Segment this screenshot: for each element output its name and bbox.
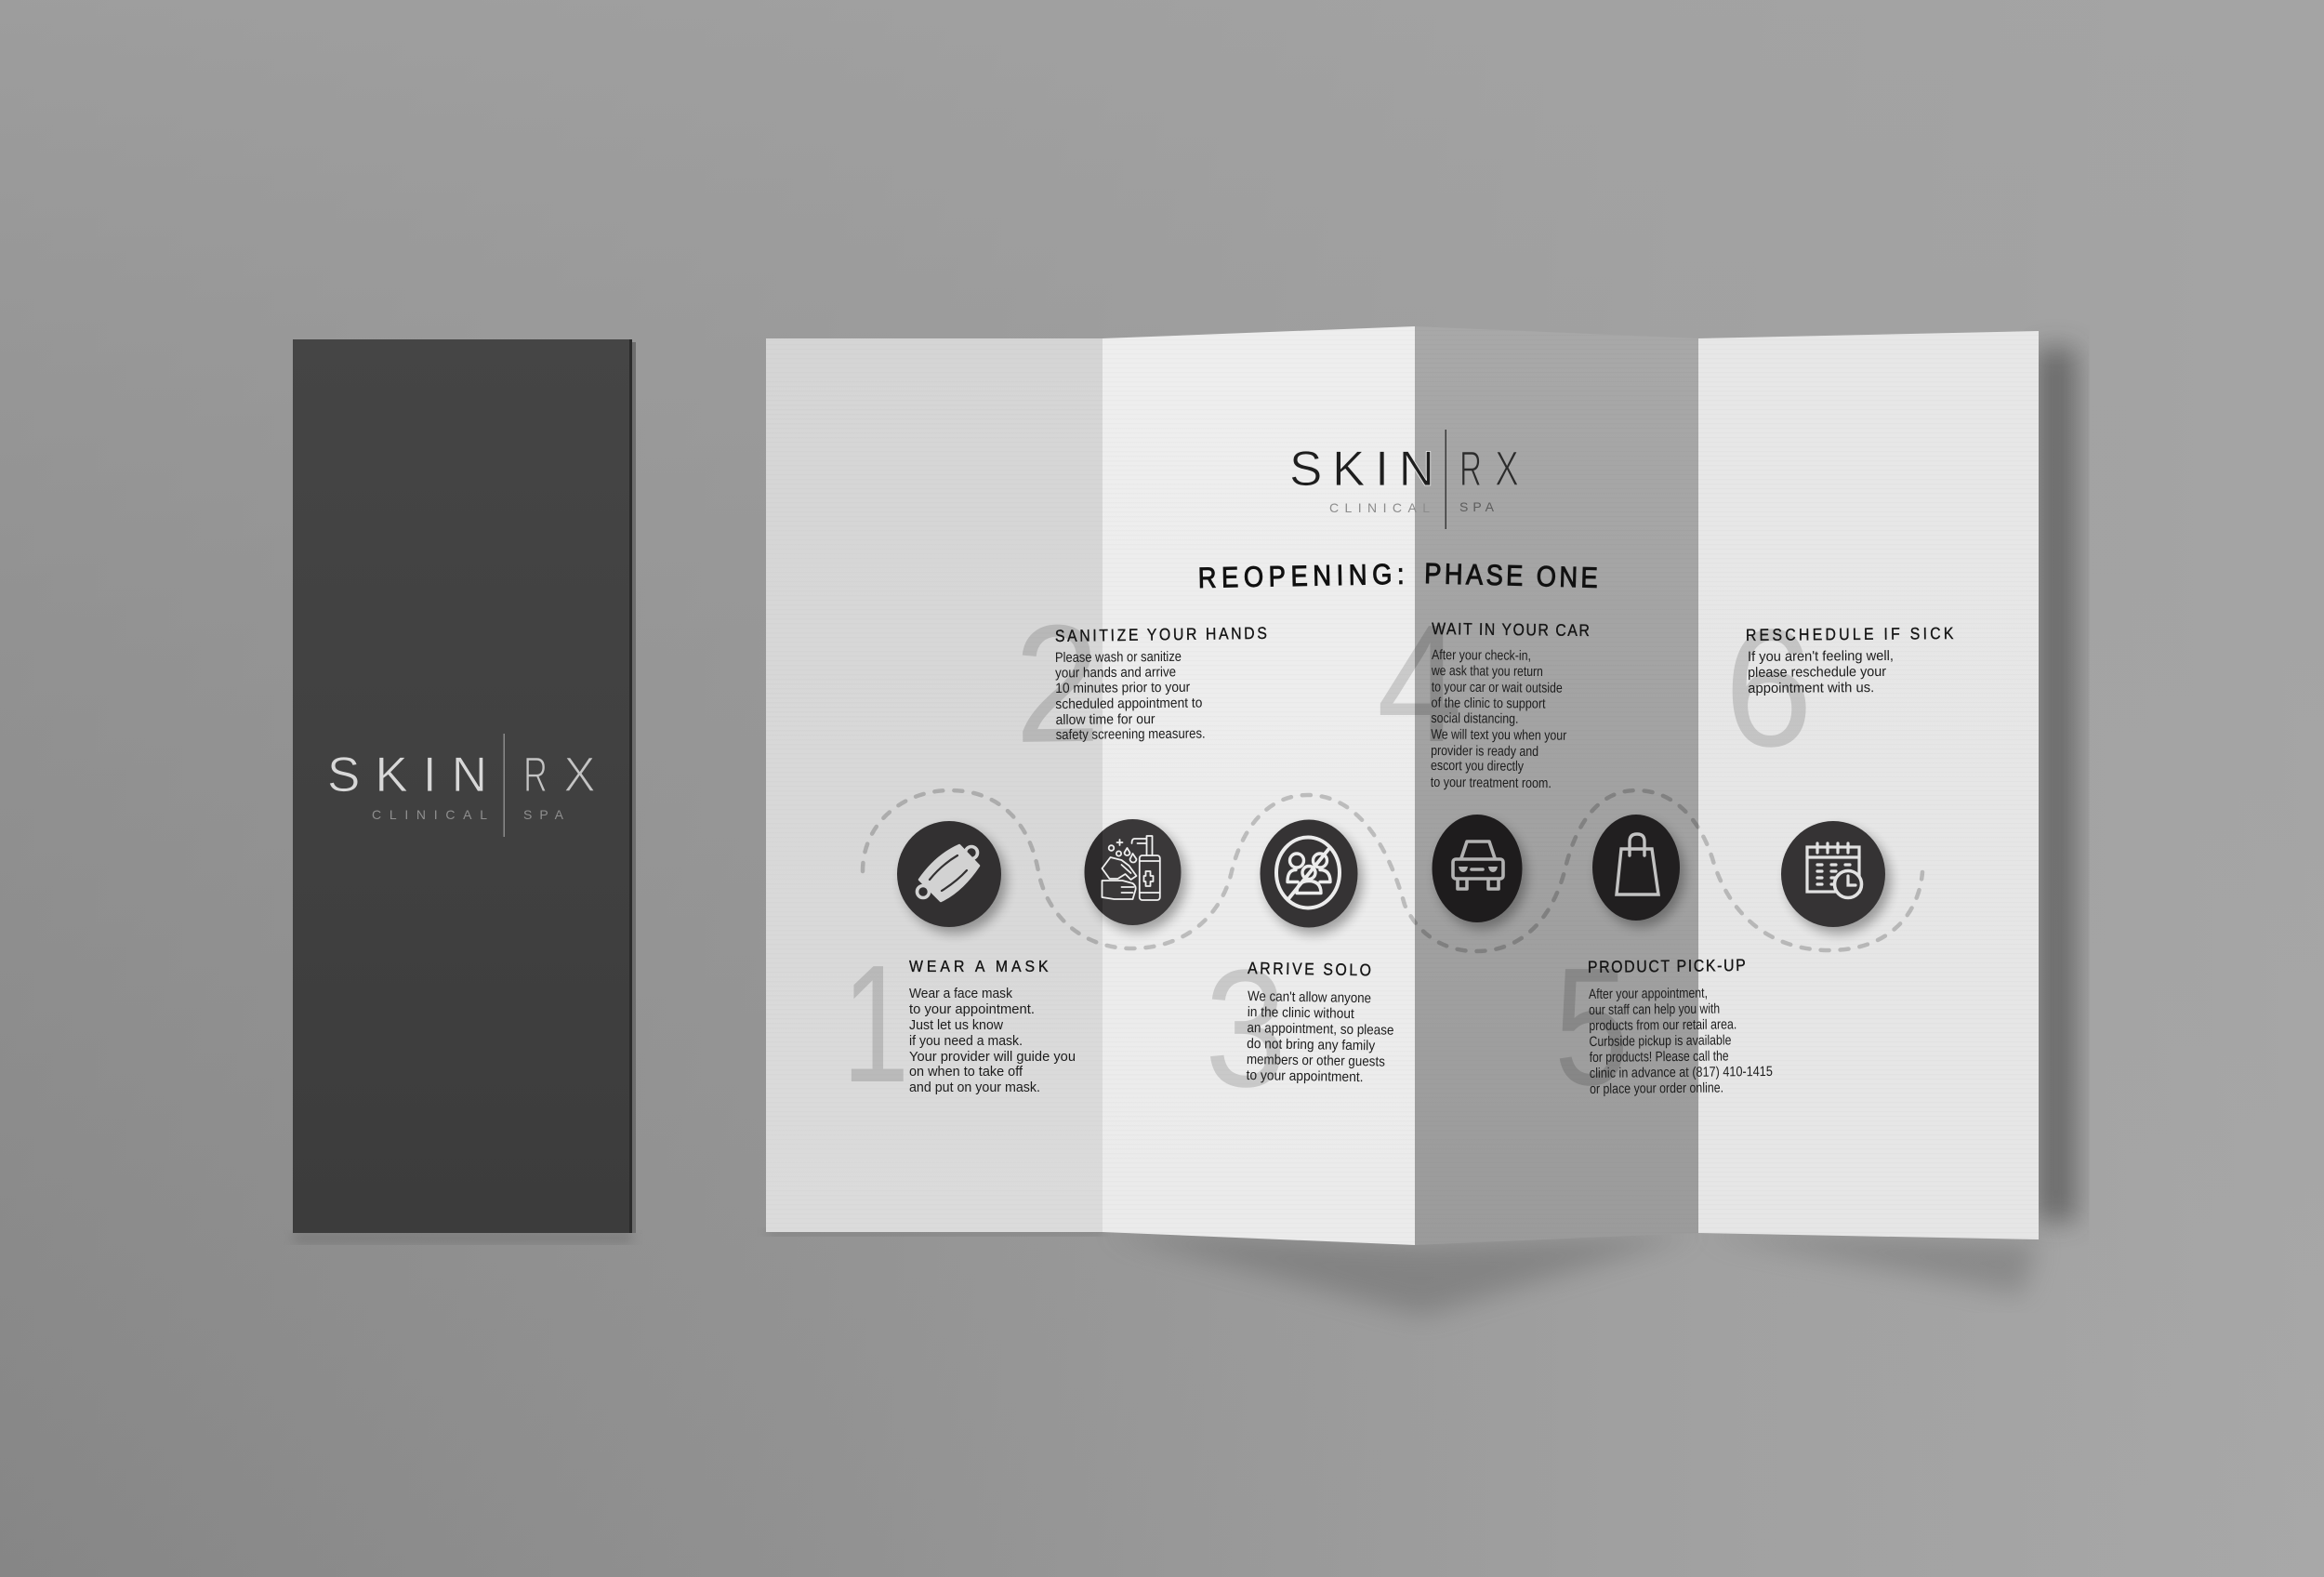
body text: wear a mask — [909, 986, 1076, 1095]
heading: product pick-up: PRODUCT PICK-UP — [1588, 956, 1746, 976]
body text: product pick-up — [1589, 985, 1773, 1097]
title: REOPENING: — [1197, 559, 1405, 594]
logo on brochure: R — [1459, 442, 1482, 497]
body text: product pick-up: or place your order online. — [1590, 1080, 1723, 1097]
body text: wear a mask: if you need a mask. — [909, 1033, 1023, 1049]
number 2: 2 — [1013, 589, 1102, 778]
step 5: product pick-up — [1554, 933, 1773, 1120]
step 4: wait in your car — [1377, 590, 1590, 791]
body text: reschedule if sick: If you aren't feeling well, — [1748, 648, 1894, 665]
panel: fold 4 — [1698, 331, 2039, 1239]
logo on brochure: X — [1495, 442, 1519, 497]
paper texture — [766, 326, 2039, 1245]
body text: sanitize your hands: your hands and arrive — [1055, 664, 1176, 681]
body text: reschedule if sick: appointment with us. — [1748, 680, 1874, 696]
number 5: 5 — [1554, 933, 1629, 1120]
number 4: 4 — [1377, 590, 1462, 777]
cover logo: X — [563, 748, 596, 802]
body text: arrive solo — [1246, 988, 1394, 1086]
logo on brochure: SKIN — [1289, 442, 1434, 497]
body text: wait in your car: social distancing. — [1431, 710, 1519, 727]
step 6: reschedule if sick — [1724, 595, 1954, 782]
body text: sanitize your hands: allow time for our — [1055, 711, 1155, 728]
logo on brochure — [1289, 430, 1519, 529]
panel: fold 2 — [1103, 326, 1415, 1245]
body text: product pick-up: products from our retail area. — [1589, 1016, 1736, 1034]
step 3: arrive solo — [1205, 935, 1394, 1121]
brochure cast shadows — [768, 348, 2077, 1316]
body text: arrive solo: We can't allow anyone — [1248, 988, 1371, 1006]
body text: arrive solo: do not bring any family — [1247, 1036, 1376, 1054]
logo on brochure: CLINICAL — [1329, 500, 1430, 515]
body text: sanitize your hands: 10 minutes prior to your — [1055, 680, 1190, 696]
title: PHASE ONE — [1424, 558, 1598, 594]
body text: wait in your car: to your car or wait outside — [1432, 679, 1563, 696]
body text: wait in your car: escort you directly — [1431, 758, 1524, 775]
body text: wait in your car: provider is ready and — [1431, 743, 1538, 760]
panel: fold 3 — [1415, 326, 1698, 1245]
icon: face mask — [897, 821, 1007, 934]
icon: no companions — [1261, 820, 1363, 934]
step 1: wear a mask — [842, 931, 1076, 1118]
icon: car — [1432, 815, 1526, 929]
body text: arrive solo: in the clinic without — [1248, 1004, 1355, 1022]
logo on brochure: SPA — [1459, 499, 1495, 514]
cover logo: R — [523, 748, 548, 802]
cover logo — [327, 734, 596, 837]
body text: product pick-up: Curbside pickup is available — [1589, 1032, 1732, 1050]
icon: hand sanitizer — [1084, 819, 1186, 932]
body text: wear a mask: Just let us know — [909, 1017, 1003, 1033]
body text: reschedule if sick: please reschedule your — [1748, 664, 1886, 681]
body text: wait in your car — [1430, 647, 1567, 791]
body text: wear a mask: Your provider will guide you — [909, 1049, 1076, 1065]
folded brochure cover — [293, 339, 636, 1242]
icon: calendar with clock — [1781, 821, 1891, 934]
heading: arrive solo: ARRIVE SOLO — [1248, 959, 1371, 980]
body text: wait in your car: of the clinic to support — [1432, 695, 1546, 712]
body text: sanitize your hands: scheduled appointment to — [1055, 696, 1202, 712]
title — [1197, 558, 1598, 594]
open brochure paper — [766, 326, 2039, 1245]
body text: reschedule if sick — [1748, 648, 1894, 696]
body text: wait in your car: to your treatment room. — [1431, 775, 1552, 791]
heading: sanitize your hands: SANITIZE YOUR HANDS — [1055, 624, 1267, 645]
cover logo: SPA — [523, 807, 564, 822]
body text: wear a mask: and put on your mask. — [909, 1080, 1040, 1095]
body text: sanitize your hands — [1055, 649, 1206, 743]
body text: product pick-up: clinic in advance at (817) 410-1415 — [1590, 1064, 1773, 1081]
body text: product pick-up: our staff can help you with — [1589, 1001, 1720, 1018]
dashed wave connector — [863, 790, 1922, 951]
body text: product pick-up: for products! Please call the — [1590, 1048, 1729, 1066]
heading: wear a mask: WEAR A MASK — [909, 957, 1049, 975]
cover logo: SKIN — [327, 748, 487, 802]
number 1: 1 — [842, 931, 909, 1118]
number 3: 3 — [1205, 935, 1287, 1121]
icon: shopping bag — [1592, 815, 1684, 927]
body text: sanitize your hands: safety screening measures. — [1056, 726, 1206, 743]
body text: wait in your car: we ask that you return — [1431, 663, 1543, 680]
cover logo: CLINICAL — [372, 807, 487, 822]
heading: wait in your car: WAIT IN YOUR CAR — [1432, 619, 1590, 640]
body text: sanitize your hands: Please wash or sanitize — [1055, 649, 1182, 666]
panel: fold 1 — [766, 338, 1103, 1232]
body text: wait in your car: We will text you when your — [1431, 726, 1566, 744]
body text: wear a mask: on when to take off — [909, 1064, 1023, 1080]
body text: wear a mask: to your appointment. — [909, 1001, 1035, 1017]
body text: product pick-up: After your appointment, — [1589, 986, 1708, 1002]
body text: arrive solo: to your appointment. — [1246, 1067, 1364, 1085]
body text: wear a mask: Wear a face mask — [909, 986, 1012, 1001]
number 6: 6 — [1724, 595, 1813, 782]
body text: wait in your car: After your check-in, — [1432, 647, 1531, 664]
body text: arrive solo: an appointment, so please — [1247, 1020, 1394, 1039]
body text: arrive solo: members or other guests — [1247, 1052, 1385, 1070]
heading: reschedule if sick: RESCHEDULE IF SICK — [1746, 624, 1954, 644]
step 2: sanitize your hands — [1013, 589, 1267, 778]
